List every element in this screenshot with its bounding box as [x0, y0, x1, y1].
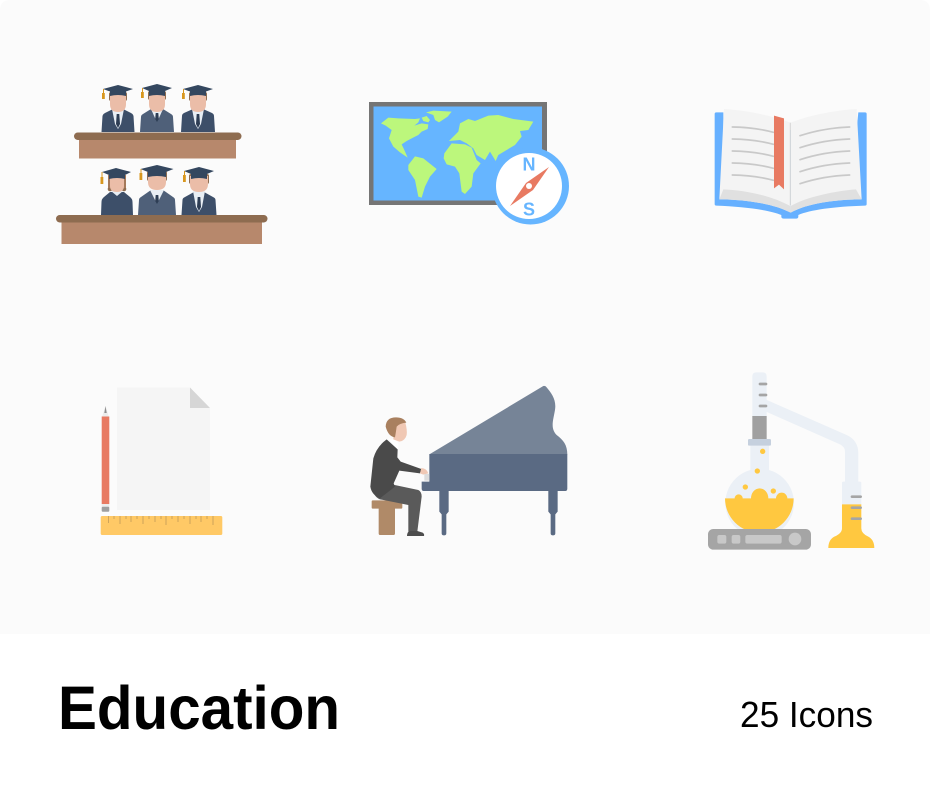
jacket — [370, 439, 421, 498]
trousers — [373, 485, 422, 532]
piano lid — [429, 386, 567, 454]
shoe — [407, 531, 424, 536]
icon: graduates seated at desks — [56, 84, 268, 244]
gutter line — [789, 123, 792, 205]
bookmark — [774, 116, 784, 189]
hot plate — [708, 529, 811, 550]
icon: open book with bookmark — [715, 109, 867, 219]
book cover — [715, 112, 867, 219]
page edges — [719, 189, 862, 213]
liquid — [725, 488, 794, 533]
hand — [420, 468, 428, 475]
shirt — [388, 438, 399, 449]
bubbles — [743, 449, 776, 494]
head — [393, 423, 407, 442]
right page — [791, 109, 862, 213]
receiver marks — [852, 497, 861, 519]
compass: S — [523, 200, 535, 220]
column — [752, 372, 767, 417]
compass: N — [522, 154, 536, 174]
bottom desk — [56, 215, 268, 244]
compass — [492, 148, 569, 224]
hair — [386, 417, 406, 437]
ruler — [101, 516, 222, 535]
receiver flask — [842, 482, 861, 505]
grey joint — [752, 416, 767, 439]
piano legs — [439, 491, 558, 535]
left page — [719, 109, 791, 213]
bottom row graduates — [100, 165, 216, 215]
column graduation marks — [760, 384, 766, 406]
map frame — [369, 102, 547, 205]
icon: pianist at grand piano — [370, 386, 567, 536]
top row graduates — [102, 84, 215, 132]
paper fold — [190, 388, 210, 408]
keys — [424, 474, 429, 481]
map water — [374, 106, 542, 200]
flask glass — [725, 445, 794, 537]
icon: distillation flask on hot plate — [708, 372, 874, 550]
map continents — [381, 111, 533, 198]
icon: paper with pencil and ruler — [101, 388, 222, 535]
pencil — [102, 406, 109, 512]
title: Education — [58, 674, 340, 742]
bench — [372, 500, 402, 535]
piano body — [422, 454, 567, 491]
icon count: 25 Icons — [740, 694, 873, 735]
side arm tube — [766, 400, 858, 482]
top desk — [74, 132, 242, 158]
paper sheet — [117, 388, 210, 510]
collar — [748, 439, 771, 446]
icon: world map with compass — [369, 102, 569, 224]
text lines — [732, 127, 850, 184]
